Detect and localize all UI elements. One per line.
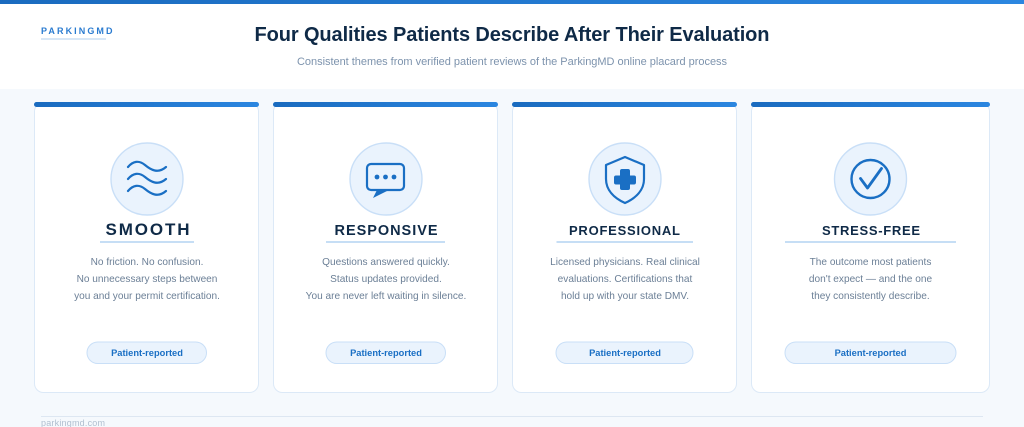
badge: Patient-reported: [111, 348, 183, 358]
panel: stress-free: [751, 102, 990, 392]
description: don't expect — and the one: [809, 274, 932, 285]
description: The outcome most patients: [810, 257, 931, 268]
icon: waves: [111, 143, 183, 215]
icon: check circle: [834, 143, 906, 215]
title: Four Qualities Patients Describe After Their Evaluation: [254, 24, 770, 46]
subtitle: Consistent themes from verified patient reviews of the ParkingMD online placard process: [297, 56, 728, 68]
badge: [87, 342, 206, 364]
description: [306, 257, 466, 302]
badge: [326, 342, 446, 364]
panel: smooth: [34, 102, 259, 392]
panel: professional: [512, 102, 737, 392]
description: evaluations. Certifications that: [558, 274, 693, 285]
badge: Patient-reported: [835, 348, 907, 358]
heading: STRESS-FREE: [822, 223, 920, 238]
header: [0, 0, 1024, 89]
logo wordmark: PARKINGMD: [41, 26, 113, 36]
icon: speech bubble: [350, 143, 422, 215]
heading: RESPONSIVE: [334, 223, 438, 239]
description: hold up with your state DMV.: [561, 291, 689, 302]
badge: [785, 342, 956, 364]
description: Status updates provided.: [330, 274, 442, 285]
description: you and your permit certification.: [74, 291, 220, 302]
heading: PROFESSIONAL: [569, 223, 680, 238]
description: No friction. No confusion.: [91, 257, 203, 268]
heading: SMOOTH: [106, 220, 190, 239]
description: [550, 257, 700, 302]
badge: [556, 342, 693, 364]
description: [74, 257, 220, 302]
badge: Patient-reported: [350, 348, 422, 358]
description: No unnecessary steps between: [77, 274, 217, 285]
description: they consistently describe.: [811, 291, 930, 302]
description: [809, 257, 932, 302]
panel: responsive: [273, 102, 498, 392]
description: Licensed physicians. Real clinical: [550, 257, 700, 268]
description: You are never left waiting in silence.: [306, 291, 466, 302]
badge: Patient-reported: [589, 348, 661, 358]
icon: shield with medical cross: [589, 143, 661, 215]
description: Questions answered quickly.: [322, 257, 450, 268]
